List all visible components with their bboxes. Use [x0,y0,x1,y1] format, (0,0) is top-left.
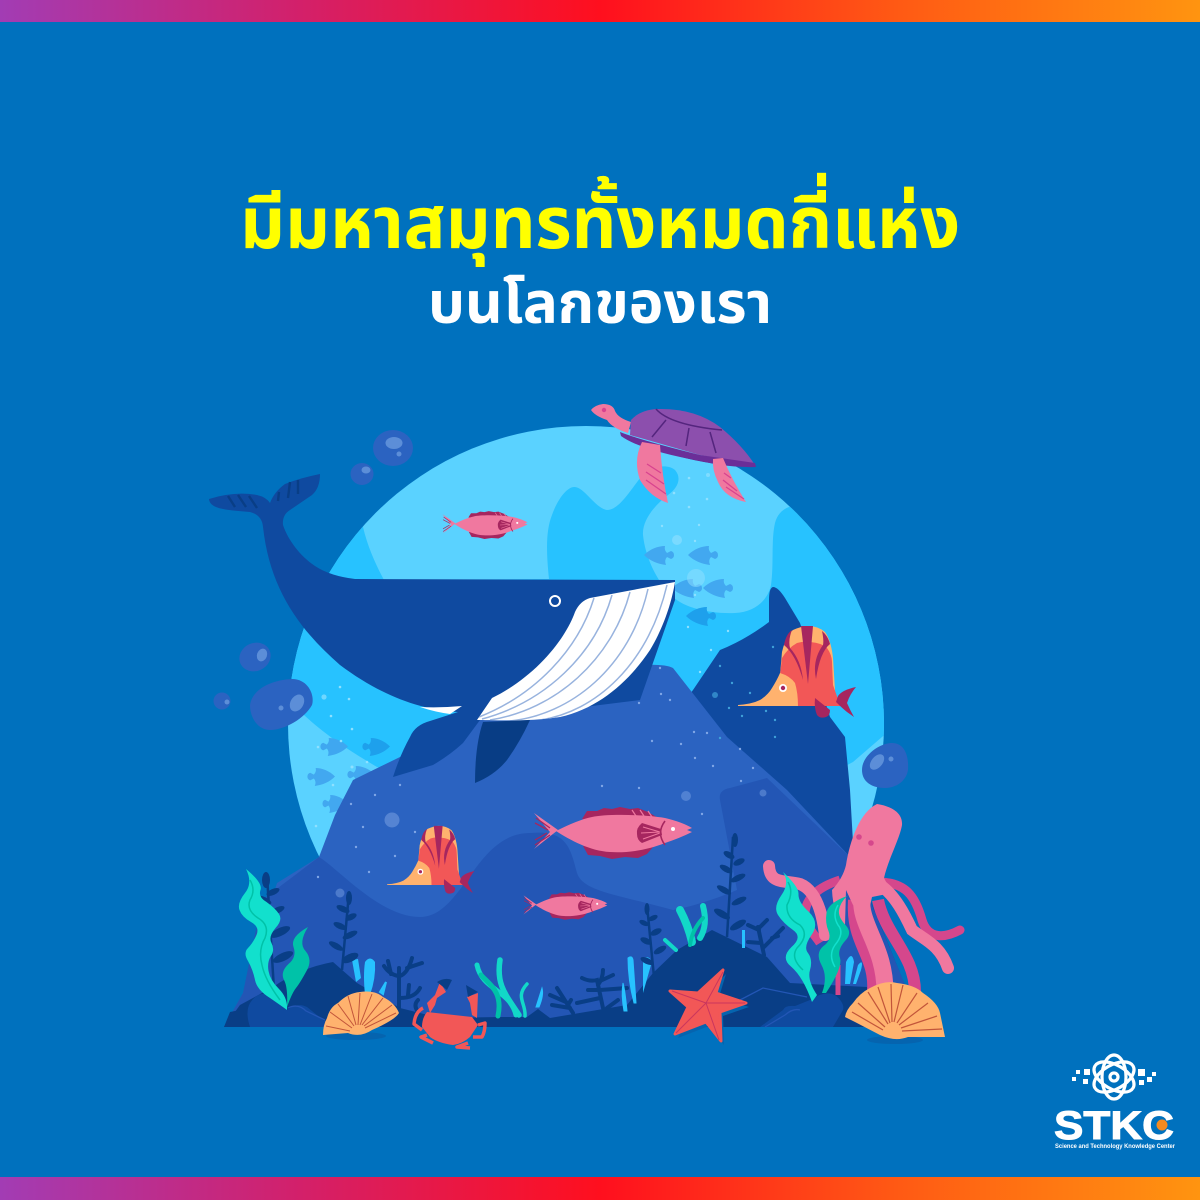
lower ridge [224,778,905,1027]
logo emblem [1072,1055,1156,1099]
pink fish lower [524,892,607,920]
title line 2: บนโลกของเรา [428,271,772,336]
whale eye [550,596,560,606]
globe sparkles [315,473,729,827]
light blue corals [352,930,862,1011]
title line 1: มีมหาสมุทรทั้งหมดกี่แห่ง [240,173,960,267]
starfish [670,970,749,1045]
back mountain [600,587,905,985]
pink fish large [534,807,692,859]
thin teal weeds [477,906,705,1016]
whale rear fin [475,720,530,783]
logo tagline: Science and Technology Knowledge Center [1055,1144,1176,1150]
right seaweed [776,872,849,1002]
bottom gradient bar [0,1177,1200,1200]
octopus [769,804,960,995]
top gradient bar [0,0,1200,22]
left shell [323,992,399,1040]
pink fish top [443,511,527,539]
mountain sparkles [317,667,766,898]
school of small fish [307,546,733,813]
logo wordmark: STKC [1054,1104,1174,1148]
dark leaf plants [255,833,748,990]
front mountain [224,665,905,1027]
STKC logo [1054,1055,1176,1150]
title [240,173,960,336]
seabed and rocks [224,930,890,1027]
whale throat [477,582,675,720]
right shell [845,982,945,1044]
ocean illustration [209,404,960,1048]
left seaweed [239,869,310,1010]
whale [209,474,675,783]
whale body [209,474,675,777]
branch corals back [384,920,783,1020]
whale belly sliver [420,706,462,714]
whale tail stripes [228,480,298,508]
turtle [591,404,756,503]
red fish right [738,626,856,718]
red fish left [387,826,474,894]
whale throat grooves [479,585,667,721]
bubbles [214,430,908,788]
logo orange dot [1156,1120,1168,1130]
globe [288,426,884,856]
crab [414,979,485,1048]
